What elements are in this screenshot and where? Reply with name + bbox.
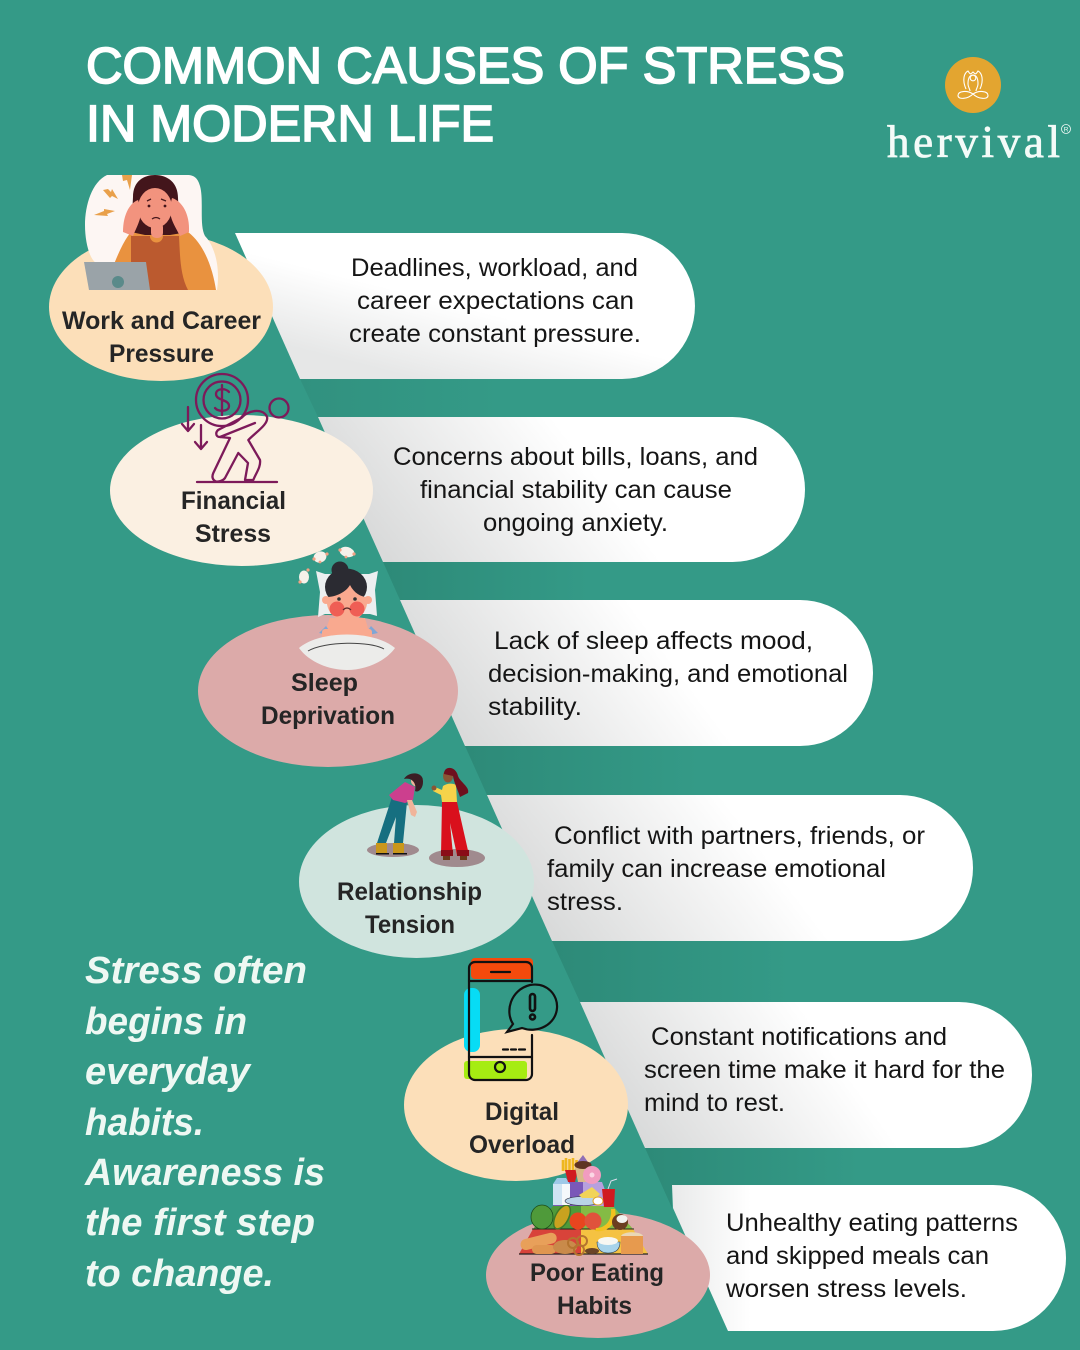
text block: awareness message: habits. [85,1102,204,1144]
callout: relationship description: family can increase emotional [547,855,886,883]
panel: poor eating habits [486,1155,1066,1338]
text block: awareness message [84,950,325,1295]
panel: work and career pressure [49,175,695,381]
label: financial: Financial [181,487,286,515]
label: digital: Overload [469,1131,575,1159]
panel: sleep deprivation [198,545,873,767]
panel: relationship tension [299,768,973,958]
callout: digital description [580,1002,1032,1148]
callout: eating description [672,1185,1066,1331]
logo: hervival: hervival [887,117,1060,167]
text block: awareness message: the first step [85,1202,315,1244]
label: sleep: Sleep [291,669,358,697]
icon: food pyramid [519,1155,648,1255]
callout: relationship description: stress. [547,888,623,916]
text block: awareness message: everyday [85,1051,252,1093]
callout: sleep description: decision-making, and emotional [488,660,848,688]
text block: awareness message: to change. [85,1253,274,1295]
callout: eating description: and skipped meals can [726,1242,989,1270]
label: eating: Poor Eating [530,1259,664,1287]
callout: relationship description: Conflict with partners, friends, or [554,822,925,850]
callout: financial description: Concerns about bills, loans, and [393,443,758,471]
badge: digital [404,1029,628,1181]
label: financial [181,487,286,548]
callout: financial description: ongoing anxiety. [483,509,668,537]
badge: relationship [299,805,534,958]
text block: awareness message: Awareness is [84,1152,325,1194]
callout: sleep description: stability. [488,693,582,721]
callout: digital description: screen time make it hard for the [644,1056,1005,1084]
icon: smartphone with alert [464,958,557,1080]
text block: awareness message: Stress often [85,950,307,992]
callout: work description: career expectations can [357,287,634,315]
callout: eating description: Unhealthy eating patterns [726,1209,1018,1237]
label: sleep [261,669,395,730]
label: work [62,307,261,368]
icon: stressed woman at laptop [84,175,218,290]
logo: hervival: R [1064,126,1069,134]
label: eating [530,1259,664,1320]
text block: awareness message: begins in [85,1001,247,1043]
label: digital [469,1098,575,1159]
panel: digital overload [404,958,1032,1181]
label: relationship: Tension [365,911,455,939]
callout: work description [235,233,695,379]
badge: work [49,233,273,381]
title [86,37,845,152]
callout: sleep description [400,600,873,746]
label: work: Work and Career [62,307,261,335]
callout: work description: Deadlines, workload, and [351,254,638,282]
label: relationship: Relationship [337,878,482,906]
callout: financial description [318,417,805,562]
callout: digital description: mind to rest. [644,1089,785,1117]
label: financial: Stress [195,520,271,548]
icon: person carrying coin [182,374,288,482]
badge: sleep [198,615,458,767]
callout: sleep description: Lack of sleep affects mood, [494,627,813,655]
panel: financial stress [110,374,805,566]
label: digital: Digital [485,1098,559,1126]
callout: eating description: worsen stress levels. [725,1275,967,1303]
logo: hervival [887,57,1070,167]
callout: work description: create constant pressure. [349,320,641,348]
callout: relationship description [487,795,973,941]
label: work: Pressure [109,340,214,368]
icon: sleepless woman in bed [298,545,395,670]
title: IN MODERN LIFE [86,95,494,152]
badge: eating [486,1212,710,1338]
label: sleep: Deprivation [261,702,395,730]
badge: financial [110,415,373,566]
icon: two women arguing [367,768,485,867]
label: eating: Habits [557,1292,632,1320]
callout: digital description: Constant notifications and [651,1023,947,1051]
callout: financial description: financial stability can cause [420,476,732,504]
label: relationship [337,878,482,939]
title: COMMON CAUSES OF STRESS [86,37,845,94]
